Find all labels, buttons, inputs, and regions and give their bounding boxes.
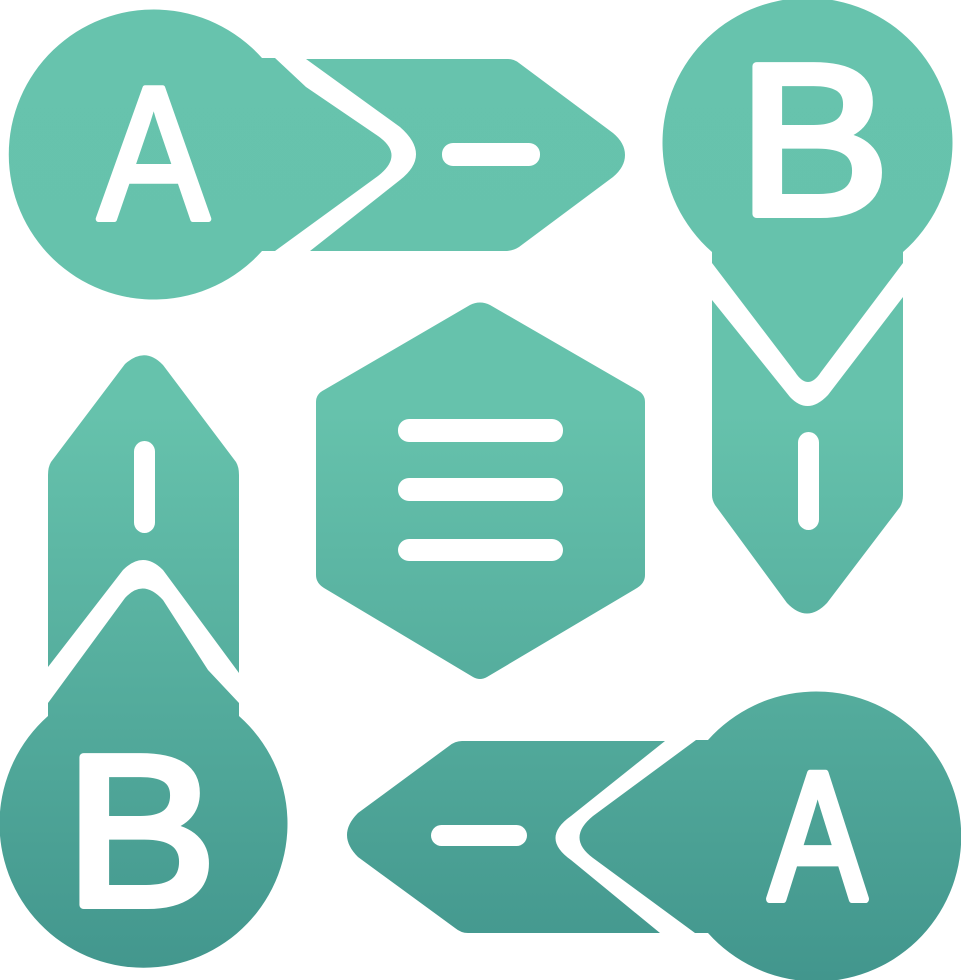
top-right pin: B: B bbox=[738, 20, 890, 260]
top-left pin: A: A bbox=[98, 47, 209, 259]
bottom-left pin: B bbox=[0, 588, 288, 968]
top-right pin: B bbox=[662, 0, 952, 382]
left arrow tag with dash bbox=[48, 355, 239, 673]
bottom arrow tag with dash bbox=[347, 741, 665, 933]
bottom-left pin: B: B bbox=[65, 711, 217, 951]
top arrow tag with dash bbox=[306, 59, 625, 251]
center hexagon with menu lines bbox=[316, 302, 645, 679]
top-left pin: A bbox=[9, 10, 392, 300]
bottom-right pin: A: A bbox=[769, 734, 866, 938]
bottom-right pin: A bbox=[580, 692, 961, 980]
right arrow tag with dash bbox=[712, 297, 903, 614]
